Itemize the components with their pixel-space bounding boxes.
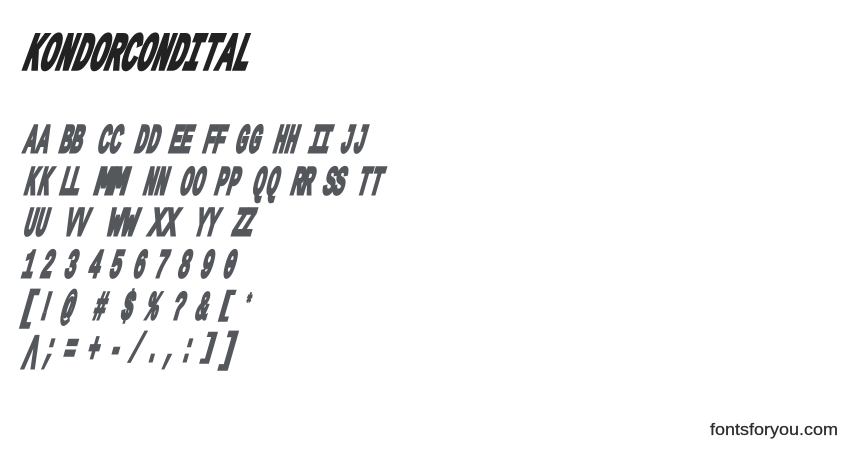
glyph row: symbols two: / [124, 328, 149, 373]
glyph row: digits: 6 [128, 244, 152, 289]
glyph row: U to Z: WW [102, 203, 144, 248]
glyph row: symbols one: ! [34, 286, 58, 331]
glyph row: A to J: II [304, 119, 338, 164]
glyph row: A to J: AA [19, 119, 56, 164]
glyph row: K to T: KK [20, 161, 58, 206]
glyph row: symbols one: $ [116, 286, 140, 331]
glyph row: A to J: GG [230, 119, 268, 164]
glyph row: digits: 0 [218, 244, 242, 289]
glyph row: symbols two: = [58, 328, 83, 373]
glyph row: symbols two: ^ [11, 327, 47, 405]
glyph row: digits: 4 [83, 244, 108, 289]
glyph row: K to T: PP [210, 161, 246, 206]
glyph row: digits: 2 [36, 244, 60, 289]
glyph row: digits [17, 244, 242, 289]
glyph row: symbols one: % [141, 286, 166, 331]
glyph row: digits: 8 [173, 244, 197, 289]
glyph row: K to T [20, 160, 389, 206]
glyph row: symbols two: ] [196, 330, 222, 366]
glyph row: K to T: SS [318, 161, 352, 206]
glyph row: symbols two: : [176, 328, 200, 373]
glyph row: symbols two: ; [38, 328, 62, 373]
glyph row: digits: 5 [104, 244, 129, 289]
glyph row: symbols two: ] [214, 327, 244, 373]
glyph row: symbols one: [ [213, 288, 239, 324]
glyph row: symbols one: ? [167, 286, 191, 331]
glyph row: symbols one: & [191, 286, 216, 331]
glyph row: digits: 1 [17, 244, 41, 289]
glyph row: A to J: HH [269, 119, 305, 164]
glyph row: symbols one: @ [56, 286, 81, 331]
footer site name: fontsforyou.com [710, 421, 838, 439]
glyph row: A to J: EE [164, 119, 199, 164]
glyph row: U to Z: ZZ [227, 202, 261, 247]
glyph row: symbols two [11, 327, 244, 405]
title: KONDORCONDITAL [16, 26, 262, 85]
glyph row: A to J: BB [54, 119, 90, 164]
glyph row: U to Z: XX [144, 203, 185, 248]
glyph row: K to T: QQ [248, 161, 286, 206]
glyph row: K to T: RR [286, 161, 321, 206]
glyph row: digits: 7 [150, 244, 174, 289]
glyph row: K to T: OO [175, 161, 211, 206]
glyph row: K to T: NN [139, 161, 175, 206]
glyph row: symbols two: + [82, 328, 106, 373]
glyph row: digits: 3 [59, 244, 84, 289]
glyph row: digits: 9 [195, 244, 220, 289]
glyph row: symbols two: - [104, 328, 128, 373]
glyph row: symbols one: * [240, 291, 255, 318]
glyph row: symbols two: , [159, 328, 183, 373]
glyph row: U to Z: YY [189, 202, 225, 247]
glyph row: symbols two: . [142, 328, 166, 373]
glyph row: A to J: FF [198, 119, 232, 164]
glyph row: A to J: JJ [335, 119, 373, 164]
glyph row: A to J [19, 119, 373, 164]
glyph row: symbols one: # [88, 286, 113, 331]
glyph row: K to T: LL [54, 161, 88, 206]
glyph row: K to T: MM [89, 160, 134, 206]
glyph row: U to Z: UU [19, 202, 55, 247]
glyph row: symbols one: [ [14, 285, 44, 331]
glyph row: symbols one [14, 285, 257, 331]
glyph row: K to T: TT [352, 161, 389, 206]
glyph row: U to Z: VV [59, 202, 95, 247]
glyph row: A to J: DD [130, 119, 166, 164]
glyph row: U to Z [18, 202, 261, 248]
glyph row: A to J: CC [93, 119, 129, 164]
